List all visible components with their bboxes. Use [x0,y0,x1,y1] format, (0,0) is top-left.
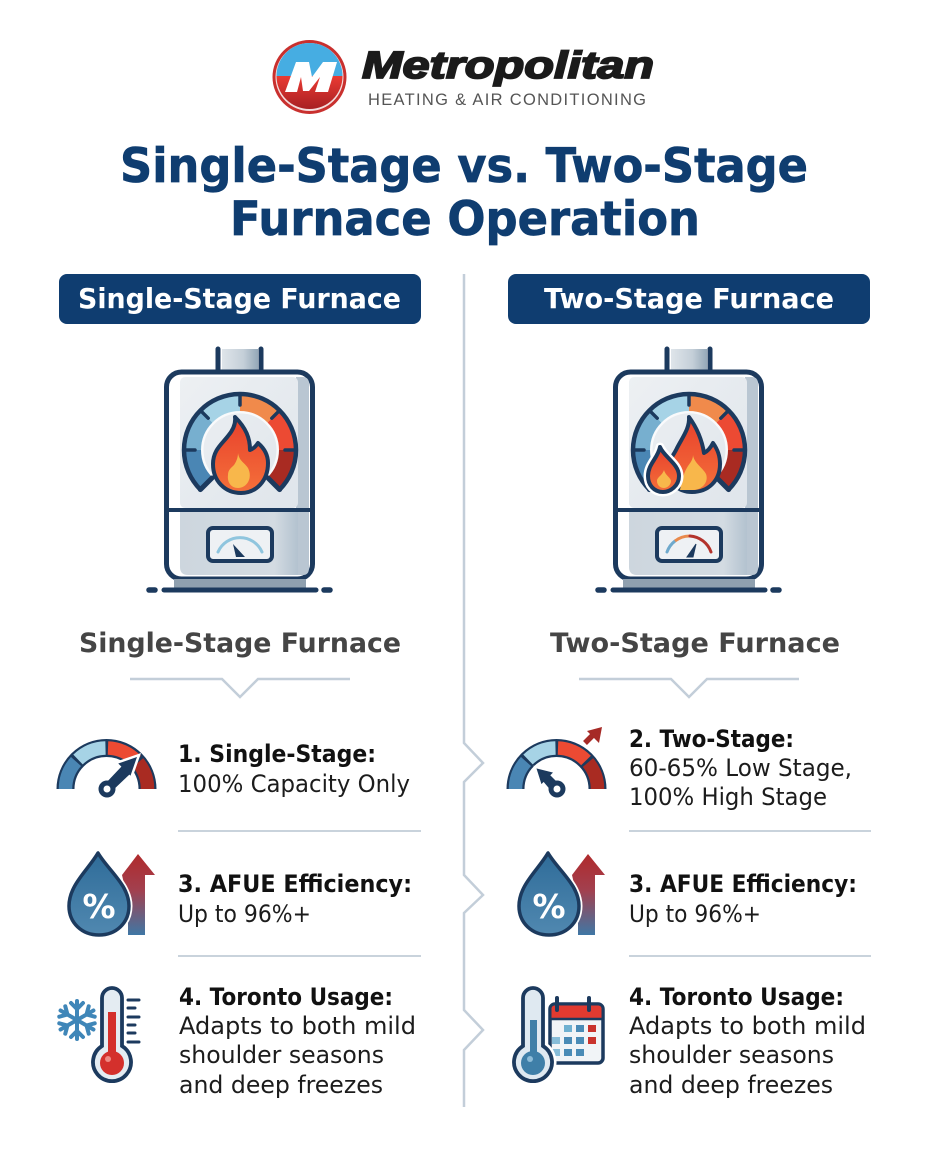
subheading pointer [130,679,350,697]
logo [272,40,654,114]
text: item 2: 2. Two-Stage: [629,725,794,753]
logo wordmark: Metropolitan [362,45,654,87]
furnace illustration: single flame [149,349,330,590]
icon: snowflake and thermometer [58,988,139,1081]
text: item 3: Up to 96%+ [178,900,311,928]
logo tagline: HEATING & AIR CONDITIONING [368,91,646,109]
icon: AFUE drop with arrow [69,853,155,935]
text: item 4: shoulder seasons [179,1041,384,1069]
icon: AFUE drop with arrow [519,853,605,935]
text: item 4: 4. Toronto Usage: [629,983,844,1011]
text: item 3: 3. AFUE Efficiency: [629,870,857,898]
text: item 3 [178,870,412,928]
text: item 4: Adapts to both mild [179,1012,416,1040]
subheading pointer [579,679,799,697]
title: Single-Stage vs. Two-Stage [120,139,808,194]
text: item 2: 100% High Stage [629,783,827,811]
text: item 1: 100% Capacity Only [178,770,410,798]
icon: full capacity gauge [65,748,148,798]
icon: two-stage gauge [515,727,602,798]
text: item 3: Up to 96%+ [629,900,761,928]
text: item 4: 4. Toronto Usage: [179,983,393,1011]
title: Furnace Operation [230,192,700,247]
text: item 4: and deep freezes [629,1071,833,1099]
title [120,139,808,247]
text: item 1: 1. Single-Stage: [178,740,376,768]
text: item 3 [629,870,857,928]
heading pill: single-stage [59,274,421,324]
icon: AFUE drop with arrow: % [532,887,566,926]
text: item 4 [629,983,866,1099]
subheading: two-stage: Two-Stage Furnace [550,628,840,659]
heading pill: single-stage: Single-Stage Furnace [78,282,401,315]
logo badge [272,40,346,114]
heading pill: two-stage [508,274,870,324]
subheading: single-stage: Single-Stage Furnace [79,628,401,659]
panel: single-stage column [58,274,421,1099]
text: item 3: 3. AFUE Efficiency: [178,870,412,898]
text: item 4: Adapts to both mild [629,1012,866,1040]
text: item 2 [629,725,852,811]
icon: thermometer and calendar [514,988,603,1081]
panel: two-stage column [508,274,871,1099]
icon: AFUE drop with arrow: % [82,887,116,926]
center divider with chevrons [464,274,483,1107]
text: item 4: and deep freezes [179,1071,383,1099]
furnace illustration: two flames [598,349,779,590]
heading pill: two-stage: Two-Stage Furnace [544,282,834,315]
text: item 4 [179,983,416,1099]
text: item 4: shoulder seasons [629,1041,834,1069]
text: item 1 [178,740,410,798]
text: item 2: 60-65% Low Stage, [629,754,852,782]
